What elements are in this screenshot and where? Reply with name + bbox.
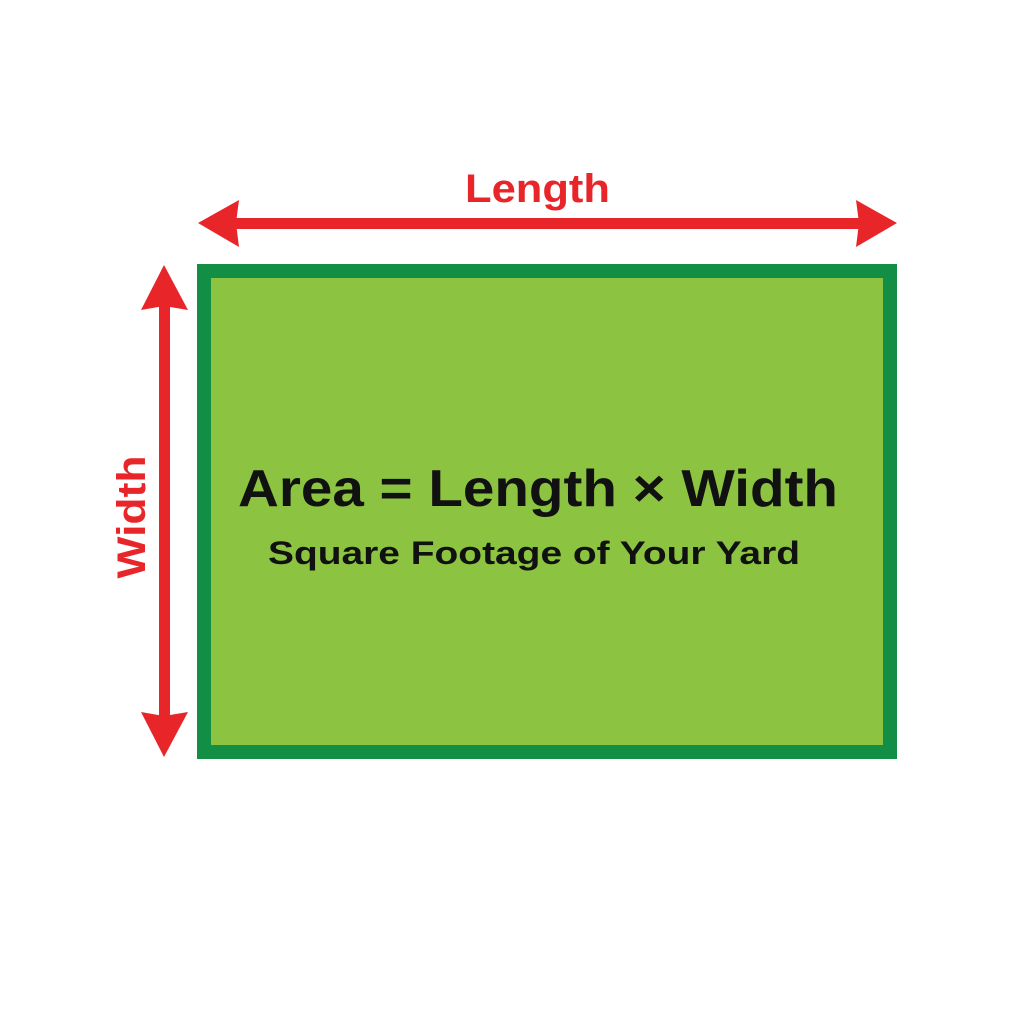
arrow: width [141,265,188,757]
label: width: Width [110,456,154,578]
arrow: length [198,200,897,247]
formula text: Area = Length × Width [238,460,838,518]
lawn rectangle [204,271,890,752]
subtitle text: Square Footage of Your Yard [268,535,800,571]
label: length: Length [465,167,610,211]
